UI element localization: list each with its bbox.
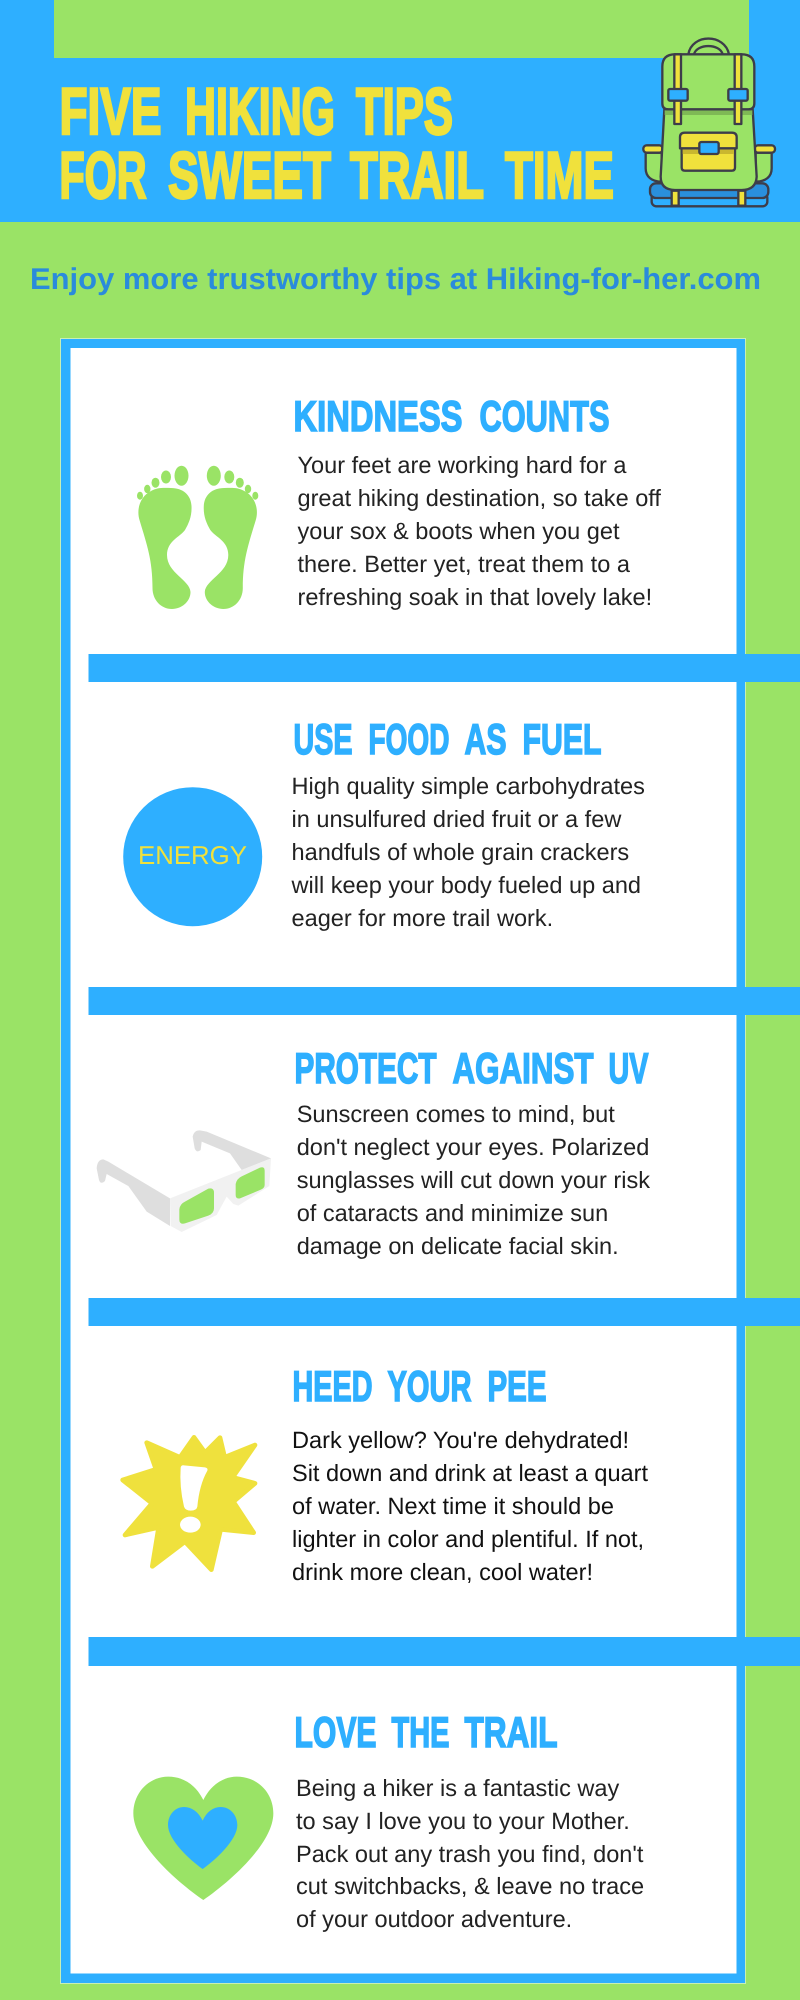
- icon: energy circle: [123, 787, 262, 926]
- text: protect against uv: Sunscreen comes to mind, but: [297, 1101, 615, 1127]
- divider bar 2: [88, 987, 800, 1015]
- title: [60, 74, 614, 212]
- text: protect against uv: of cataracts and minimize sun: [297, 1200, 608, 1226]
- title: TIME: [505, 138, 614, 212]
- icon: bare feet: [137, 466, 258, 609]
- title: FIVE: [60, 74, 162, 148]
- title: TIPS: [356, 74, 453, 148]
- heading: heed your pee: [292, 1363, 546, 1411]
- text: use food as fuel: in unsulfured dried fruit or a few: [292, 806, 622, 832]
- text: protect against uv: [297, 1101, 650, 1259]
- text: heed your pee: lighter in color and plentiful. If not,: [292, 1526, 644, 1552]
- heading: kindness counts: COUNTS: [480, 393, 610, 441]
- heading: use food as fuel: [294, 716, 602, 764]
- text: love the trail: [296, 1775, 644, 1932]
- heading: use food as fuel: FUEL: [522, 716, 602, 764]
- heading: use food as fuel: USE: [294, 716, 352, 764]
- icon: energy circle: ENERGY: [138, 842, 247, 870]
- text: use food as fuel: [290, 773, 645, 931]
- heading: kindness counts: KINDNESS: [294, 393, 462, 441]
- text: use food as fuel: handfuls of whole grain crackers: [292, 839, 629, 865]
- text: kindness counts: Your feet are working hard for a: [298, 452, 627, 478]
- divider bar 1: [88, 654, 800, 682]
- heading: love the trail: THE: [392, 1709, 450, 1757]
- heading: protect against uv: AGAINST: [452, 1045, 594, 1093]
- text: heed your pee: Sit down and drink at least a quart: [292, 1460, 648, 1486]
- text: kindness counts: refreshing soak in that lovely lake!: [298, 584, 652, 610]
- heading: use food as fuel: AS: [464, 716, 506, 764]
- text: protect against uv: damage on delicate facial skin.: [297, 1233, 619, 1259]
- text: kindness counts: there. Better yet, treat them to a: [298, 551, 631, 577]
- subtitle link line: Enjoy more trustworthy tips at Hiking-for-her.com: [30, 263, 761, 296]
- title: FOR: [60, 138, 146, 212]
- panel: white interior: [70, 348, 736, 1974]
- text: use food as fuel: High quality simple carbohydrates: [292, 773, 645, 799]
- heading: love the trail: [294, 1709, 558, 1757]
- icon: sunglasses: [97, 1130, 271, 1232]
- panel: tips frame: [60, 338, 746, 1984]
- heading: heed your pee: YOUR: [388, 1363, 472, 1411]
- heading: heed your pee: HEED: [292, 1363, 372, 1411]
- divider bar 4: [88, 1637, 800, 1666]
- title: TRAIL: [350, 138, 484, 212]
- heading: use food as fuel: FOOD: [368, 716, 450, 764]
- icon: hearts: [133, 1777, 273, 1900]
- text: love the trail: to say I love you to your Mother.: [296, 1808, 630, 1834]
- header banner: [0, 0, 800, 222]
- heading: love the trail: TRAIL: [464, 1709, 558, 1757]
- heading: love the trail: LOVE: [294, 1709, 376, 1757]
- heading: heed your pee: PEE: [488, 1363, 546, 1411]
- text: protect against uv: sunglasses will cut down your risk: [297, 1167, 650, 1193]
- text: protect against uv: don't neglect your eyes. Polarized: [297, 1134, 649, 1160]
- icon: backpack: [643, 39, 775, 206]
- text: kindness counts: [298, 452, 661, 610]
- text: kindness counts: great hiking destination, so take off: [298, 485, 661, 511]
- text: kindness counts: your sox & boots when you get: [298, 518, 620, 544]
- text: heed your pee: drink more clean, cool water!: [292, 1559, 593, 1585]
- title: SWEET: [168, 138, 331, 212]
- text: love the trail: of your outdoor adventure.: [296, 1906, 572, 1932]
- icon: exclamation starburst: [123, 1437, 255, 1570]
- text: love the trail: Pack out any trash you find, don't: [296, 1841, 644, 1867]
- heading: protect against uv: UV: [608, 1045, 649, 1093]
- text: use food as fuel: will keep your body fueled up and: [290, 872, 641, 898]
- text: heed your pee: of water. Next time it should be: [292, 1493, 614, 1519]
- text: heed your pee: Dark yellow? You're dehydrated!: [292, 1427, 629, 1453]
- text: love the trail: Being a hiker is a fantastic way: [296, 1775, 620, 1801]
- text: use food as fuel: eager for more trail work.: [292, 905, 553, 931]
- heading: protect against uv: [294, 1045, 649, 1093]
- text: heed your pee: [292, 1427, 648, 1585]
- title: HIKING: [185, 74, 335, 148]
- text: love the trail: cut switchbacks, & leave no trace: [296, 1873, 644, 1899]
- heading: protect against uv: PROTECT: [294, 1045, 436, 1093]
- divider bar 3: [88, 1298, 800, 1326]
